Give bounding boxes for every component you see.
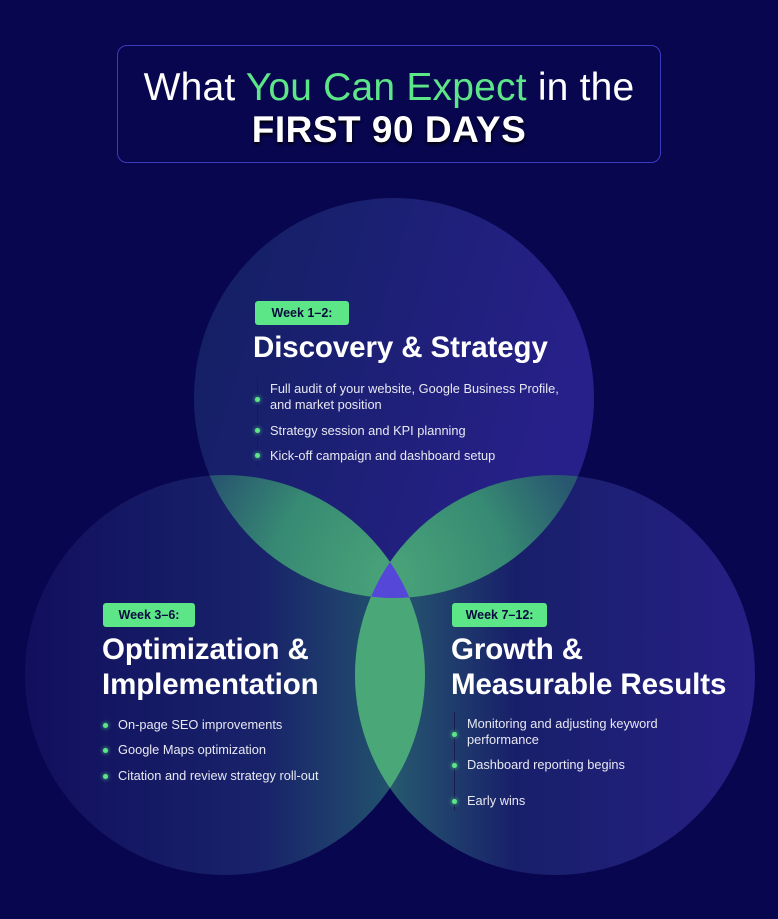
heading: optimization: Implementation xyxy=(102,668,319,701)
bullets: growth: Early wins xyxy=(467,793,525,808)
bullets: growth xyxy=(454,712,714,810)
background circles xyxy=(25,198,755,875)
heading: optimization: Optimization & xyxy=(102,633,309,666)
badge: week 1-2 xyxy=(255,301,349,325)
badge: week 7-12: Week 7–12: xyxy=(466,608,533,622)
center triangle xyxy=(371,562,410,598)
lens: top-right xyxy=(390,475,578,598)
lens: top-left xyxy=(210,475,390,597)
title box: FIRST 90 DAYS xyxy=(252,109,526,150)
heading: growth: Measurable Results xyxy=(451,668,726,701)
circle: bottom left xyxy=(25,475,425,875)
panel: week 7-12 xyxy=(450,603,726,810)
bullets: growth: performance xyxy=(467,732,539,747)
bullets: optimization xyxy=(105,715,335,791)
badge: week 3-6 xyxy=(103,603,195,627)
badge: week 3-6: Week 3–6: xyxy=(119,608,179,622)
bullets: discovery: Strategy session and KPI planning xyxy=(270,423,466,438)
bullets: discovery: Full audit of your website, Google Business Profile, xyxy=(270,381,559,396)
bullets: discovery: and market position xyxy=(270,397,382,412)
heading: growth xyxy=(451,633,726,701)
panel: week 3-6 xyxy=(100,603,319,791)
bullets: growth: Dashboard reporting begins xyxy=(467,757,625,772)
heading: discovery: Discovery & Strategy xyxy=(253,331,548,364)
panel: week 1-2 xyxy=(252,301,559,468)
badge: week 1-2: Week 1–2: xyxy=(272,306,332,320)
bullets: optimization: Google Maps optimization xyxy=(118,742,266,757)
bullets: discovery xyxy=(257,378,587,468)
badge: week 7-12 xyxy=(452,603,547,627)
bullets: optimization: On-page SEO improvements xyxy=(118,717,282,732)
heading: growth: Growth & xyxy=(451,633,583,666)
heading: optimization xyxy=(102,633,319,701)
bullets: optimization: Citation and review strategy roll-out xyxy=(118,768,319,783)
lens: bottom xyxy=(355,596,425,788)
title box xyxy=(117,45,661,163)
circle: bottom right xyxy=(355,475,755,875)
bullets: growth: Monitoring and adjusting keyword xyxy=(467,716,658,731)
bullets: discovery: Kick-off campaign and dashboard setup xyxy=(270,448,495,463)
title box: What You Can Expect in the xyxy=(144,66,634,109)
circle: top xyxy=(194,198,594,598)
